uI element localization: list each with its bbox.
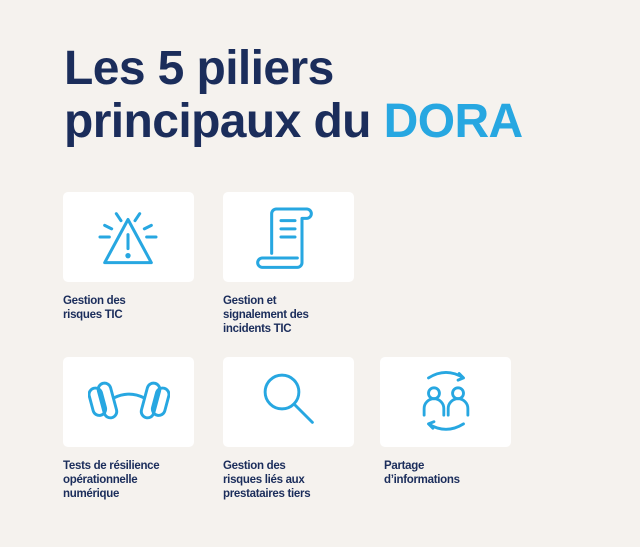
label: incidents TIC <box>223 323 291 335</box>
card: third parties <box>223 357 354 447</box>
label: numérique <box>63 488 119 500</box>
label <box>384 460 460 486</box>
label: risques liés aux <box>223 474 304 486</box>
label: Gestion des <box>223 460 286 472</box>
label: Gestion et <box>223 295 276 307</box>
label: opérationnelle <box>63 474 137 486</box>
label <box>223 295 309 335</box>
card: incidents <box>223 192 354 282</box>
icon: scroll <box>256 208 313 269</box>
label <box>223 460 310 500</box>
icon: magnifier <box>264 374 314 424</box>
title <box>64 42 523 148</box>
card: sharing <box>380 357 511 447</box>
label <box>63 460 160 500</box>
card: risk <box>63 192 194 282</box>
label: Gestion des <box>63 295 126 307</box>
label: risques TIC <box>63 309 122 321</box>
title: Les 5 piliers <box>64 42 334 95</box>
card: tests <box>63 357 194 447</box>
title: principaux du DORA <box>64 95 523 148</box>
label: signalement des <box>223 309 309 321</box>
icon: dumbbell <box>88 382 170 420</box>
label: Partage <box>384 460 424 472</box>
icon: people exchange <box>422 371 470 431</box>
label: d’informations <box>384 474 460 486</box>
icon: warning <box>98 212 158 264</box>
label: prestataires tiers <box>223 488 310 500</box>
label: Tests de résilience <box>63 460 159 472</box>
label <box>63 295 126 321</box>
